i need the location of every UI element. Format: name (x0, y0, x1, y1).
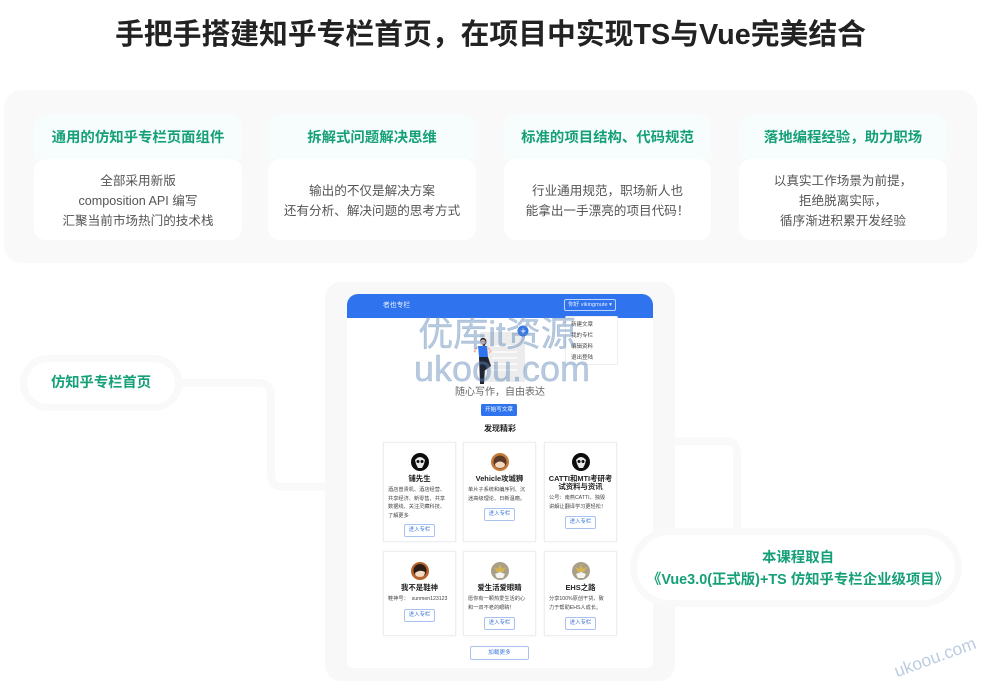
load more button (470, 646, 529, 660)
card button: 进入专栏 (409, 527, 430, 533)
card title: Vehicle攻城狮 (476, 474, 523, 483)
label: page name: 仿知乎专栏首页 (51, 375, 151, 391)
card 2 heading (268, 114, 476, 159)
card 4 heading: 落地编程经验，助力职场 (764, 130, 922, 146)
avatar (572, 453, 590, 471)
card button (484, 617, 515, 630)
card 3 heading (504, 114, 711, 159)
document (480, 332, 525, 382)
card 3 text (504, 159, 711, 240)
card button (404, 524, 435, 537)
label: course source (630, 528, 962, 607)
card 2 heading: 拆解式问题解决思维 (307, 130, 437, 146)
menu item: 新建文章 (571, 322, 593, 328)
card description: 单片子系统和编序列、沉 (468, 487, 525, 493)
card description (549, 595, 604, 611)
card title: EHS之路 (566, 583, 595, 592)
card description (388, 486, 445, 519)
woman figure (474, 338, 491, 384)
card description: 愿你有一颗热爱生活的心 (468, 596, 525, 602)
logo text: 者也专栏 (383, 302, 410, 309)
card title: 试资料与资讯 (558, 482, 603, 491)
card 2 text: 还有分析、解决问题的思考方式 (284, 204, 460, 218)
menu item: 编辑资料 (571, 344, 593, 350)
card button: 进入专栏 (409, 612, 430, 618)
card title: 爱生活爱眼睛 (477, 583, 522, 592)
card description: 鞋神号： sunmen123123 (388, 596, 447, 602)
menu item: 退出登陆 (571, 355, 593, 361)
column card 3 (544, 442, 617, 542)
card 2 text: 输出的不仅是解决方案 (309, 184, 435, 198)
card button (565, 516, 596, 529)
card 1 text: 汇聚当前市场热门的技术栈 (62, 214, 214, 228)
hero illustration (473, 326, 528, 384)
screenshot of column home page (347, 294, 653, 668)
card 3 text: 行业通用规范，职场新人也 (532, 184, 683, 198)
avatar (491, 562, 509, 580)
card description (468, 596, 525, 611)
card description: 酒店曾贵机、酒店经营、 (388, 487, 445, 493)
card button (404, 609, 435, 622)
card 4 heading (739, 114, 947, 159)
card 1 text: composition API 编写 (78, 194, 198, 208)
card 3 heading: 标准的项目结构、代码规范 (521, 130, 694, 146)
dropdown menu (565, 316, 618, 365)
column card 6 (544, 551, 617, 636)
card description: 迷高级理论、日新温瘾。 (468, 496, 525, 502)
card title (549, 474, 612, 491)
avatar (411, 453, 429, 471)
card 4 text (739, 159, 947, 240)
card title: 我不是鞋神 (401, 583, 438, 592)
column card 5 (463, 551, 536, 636)
plus badge (518, 326, 528, 336)
hero button (481, 404, 517, 416)
card button: 进入专栏 (570, 519, 591, 525)
card 4 text: 拒绝脱离实际， (799, 194, 887, 208)
panel: page mock frame (325, 282, 675, 681)
card 1 text (34, 159, 242, 240)
card button: 进入专栏 (570, 620, 591, 626)
user menu button: 你好 vikingmute ▾ (568, 302, 612, 308)
card 4 text: 循序渐进积累开发经验 (780, 214, 906, 228)
column card 4 (383, 551, 456, 636)
hero button: 开始写文章 (485, 407, 513, 413)
column card 1 (383, 442, 456, 542)
card button: 进入专栏 (489, 511, 510, 517)
card title: 铺先生 (408, 474, 431, 483)
card description: 讲解让翻译学习更轻松！ (549, 504, 606, 510)
card description: 数据线、关注灵藏科技、 (388, 504, 445, 510)
card description (468, 486, 525, 502)
card description: 和一双不老的眼睛！ (468, 605, 515, 611)
card description: 了解更多 (388, 513, 409, 519)
watermark line 2: ukoou.com (414, 348, 590, 389)
watermark: corner: ukoou.com (891, 633, 979, 681)
card description: 共享经济、新零售、共享 (388, 496, 445, 502)
menu item: 我的专栏 (571, 333, 593, 339)
load more button: 加载更多 (488, 650, 511, 656)
label: course source: 《Vue3.0(正式版)+TS 仿知乎专栏企业级项目》 (647, 572, 949, 588)
card description: 公号：南燕CATTI、独毁 (549, 495, 605, 501)
title: 手把手搭建知乎专栏首页，在项目中实现TS与Vue完美结合 (115, 19, 866, 51)
avatar (411, 562, 429, 580)
arrow: left label to page mock (178, 383, 330, 487)
card 1 heading: 通用的仿知乎专栏页面组件 (52, 130, 224, 146)
card 2 text (268, 159, 476, 240)
column card 2 (463, 442, 536, 542)
navigation bar (347, 294, 653, 318)
card button (565, 617, 596, 630)
avatar (572, 562, 590, 580)
card description: 力于帮助EHS人成长。 (549, 605, 601, 611)
card description (549, 494, 606, 510)
card 1 text: 全部采用新版 (100, 174, 176, 188)
arrow: page mock to course label (670, 441, 737, 532)
card 3 text: 能拿出一手漂亮的项目代码！ (526, 204, 689, 218)
card button: 进入专栏 (489, 620, 510, 626)
watermark: center (414, 315, 590, 389)
card title: CATTI和MTI考研考 (549, 474, 612, 483)
card 4 text: 以真实工作场景为前提， (774, 174, 912, 188)
card 1 heading (34, 114, 242, 159)
hero slogan: 随心写作，自由表达 (455, 387, 545, 398)
watermark line 1: 优库it资源 (418, 315, 576, 354)
card description: 分享100%原创干货、致 (549, 596, 604, 602)
label: course source: 本课程取自 (762, 550, 834, 566)
avatar (491, 453, 509, 471)
user menu button (564, 299, 616, 311)
card button (484, 508, 515, 521)
section heading: 发现精彩 (484, 424, 516, 433)
panel: course highlights (4, 90, 977, 263)
label: page name (20, 355, 182, 411)
